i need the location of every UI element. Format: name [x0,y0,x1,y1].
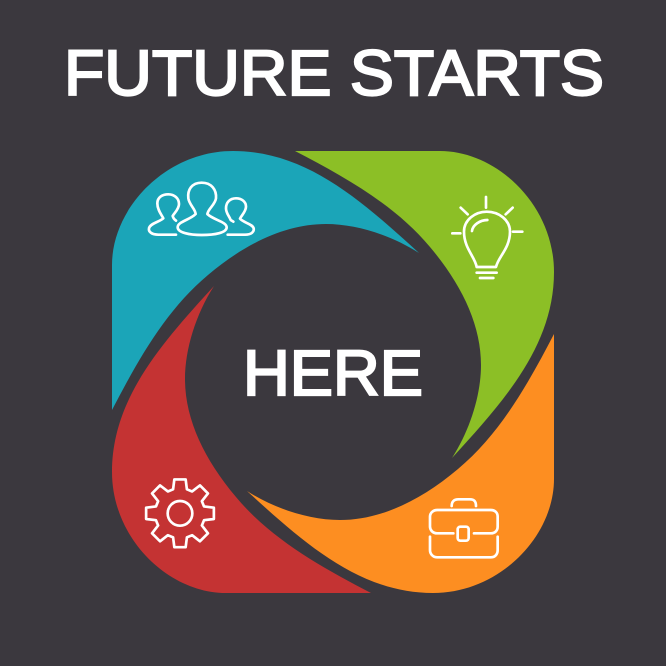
panel: orange segment [247,334,554,593]
icon: briefcase [430,499,498,557]
panel: red segment [112,286,371,593]
panel: teal segment [112,151,419,410]
icon: light bulb [452,197,522,278]
panel: green segment [295,151,554,458]
icon: gear [146,479,214,547]
center label: HERE [243,337,423,409]
icon: people [149,183,254,235]
title: FUTURE STARTS [64,37,604,109]
